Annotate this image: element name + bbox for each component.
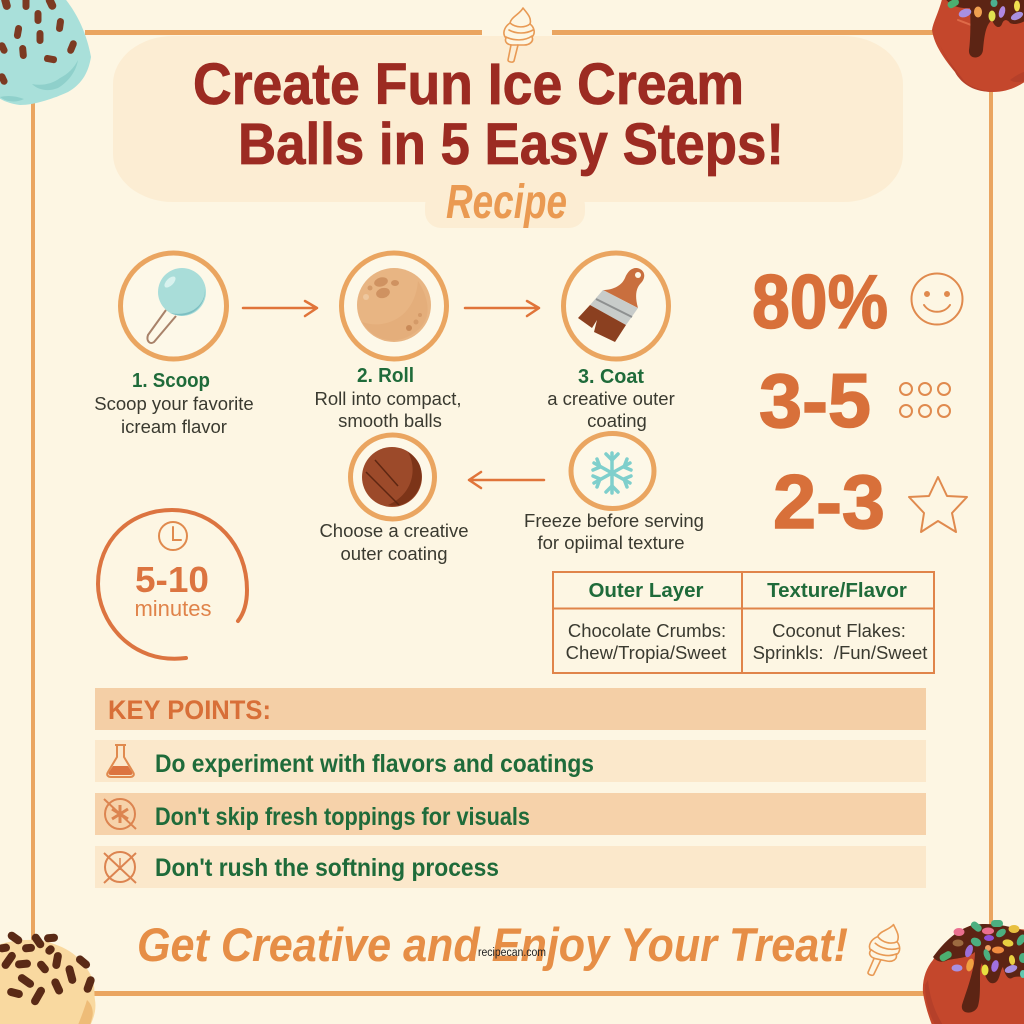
title: Create Fun Ice Cream bbox=[193, 52, 744, 117]
icon: scoop bbox=[120, 253, 226, 359]
stat: 3-5: 3-5 bbox=[759, 359, 871, 444]
corner: top right chocolate ball bbox=[932, 0, 1024, 92]
arrow 2 to 3 bbox=[465, 301, 539, 316]
comparison table bbox=[553, 572, 934, 673]
closing line: Get Creative and Enjoy Your Treat! bbox=[137, 918, 848, 971]
step 1 text: Scoop your favorite bbox=[94, 393, 254, 414]
icon: coated ball bbox=[350, 435, 434, 519]
table cells: Chocolate Crumbs: bbox=[568, 620, 726, 641]
icon: rolled ball bbox=[342, 253, 446, 359]
step 4 text line 2: for opiimal texture bbox=[537, 532, 685, 553]
corner: mint scoop bbox=[0, 0, 91, 105]
subtitle: Recipe: Recipe bbox=[446, 176, 567, 229]
step 3 heading: 3. Coat bbox=[578, 366, 644, 388]
step 1 text line 2: icream flavor bbox=[121, 416, 227, 437]
arrow 1 to 2 bbox=[243, 301, 317, 316]
stat: 80%: 80% bbox=[752, 260, 888, 345]
step 1 heading: 1. Scoop bbox=[132, 370, 210, 392]
title panel bbox=[113, 8, 903, 229]
table cells: Sprinkls: /Fun/Sweet bbox=[753, 642, 927, 663]
step 3 text line 2: coating bbox=[587, 410, 647, 431]
icon: top soft-serve cone bbox=[504, 8, 534, 62]
icon: clock bbox=[159, 522, 187, 550]
key points header bbox=[95, 688, 926, 730]
step 4 text: Freeze before serving bbox=[524, 510, 704, 531]
step 2 text: Roll into compact, bbox=[314, 388, 462, 409]
table cells: Coconut Flakes: bbox=[772, 620, 906, 641]
step 5 text line 2: outer coating bbox=[341, 543, 447, 564]
icon: smiley bbox=[912, 274, 962, 324]
icon: six circles bbox=[900, 383, 950, 417]
icon: no rushing bbox=[104, 852, 136, 883]
key point 2: Don't skip fresh toppings for visuals bbox=[155, 803, 530, 831]
step 2 heading: 2. Roll bbox=[357, 365, 414, 387]
title panel: Balls in 5 Easy Steps! bbox=[238, 112, 784, 177]
icon: star bbox=[909, 477, 967, 532]
step 1: scoop bbox=[94, 253, 254, 414]
stat: 2-3: 2-3 bbox=[773, 460, 885, 545]
stat: 2-3 bbox=[773, 460, 967, 545]
step 5 text: Choose a creative bbox=[319, 520, 469, 541]
key point 1: Do experiment with flavors and coatings bbox=[155, 750, 594, 778]
key point 2 bbox=[95, 793, 926, 835]
icon: snowflake bbox=[571, 434, 654, 508]
table cells bbox=[566, 620, 927, 663]
key points header: KEY POINTS: bbox=[108, 695, 271, 725]
timer bbox=[98, 510, 247, 659]
table headers bbox=[588, 579, 907, 602]
table headers: Texture/Flavor bbox=[767, 579, 907, 602]
step 2: roll bbox=[314, 253, 462, 409]
table cells: Chew/Tropia/Sweet bbox=[566, 642, 726, 663]
watermark: recipecan.com bbox=[478, 947, 546, 959]
step 2 text line 2: smooth balls bbox=[338, 410, 442, 431]
icon: flask bbox=[107, 745, 134, 777]
key point 3: Don't rush the softning process bbox=[155, 854, 499, 882]
icon: no toppings bbox=[104, 799, 136, 829]
arrow 4 to 5 bbox=[469, 472, 544, 488]
step 3 text: a creative outer bbox=[547, 388, 675, 409]
table headers: Outer Layer bbox=[588, 579, 704, 602]
corner: bottom left vanilla scoop bbox=[0, 930, 96, 1024]
icon: bottom soft-serve cone bbox=[864, 921, 904, 980]
corner: bottom right chocolate ball bbox=[923, 920, 1024, 1024]
key point 1 bbox=[95, 740, 926, 782]
key point 3 bbox=[95, 846, 926, 888]
stat: 3-5 bbox=[759, 359, 950, 444]
icon: brush bbox=[564, 253, 668, 359]
step 4: freeze bbox=[524, 434, 704, 531]
step 5: coating bbox=[319, 435, 469, 541]
step 3: coat bbox=[547, 253, 675, 409]
timer unit: minutes bbox=[134, 596, 212, 621]
timer value: 5-10 bbox=[135, 559, 209, 600]
key points panel bbox=[95, 688, 926, 888]
